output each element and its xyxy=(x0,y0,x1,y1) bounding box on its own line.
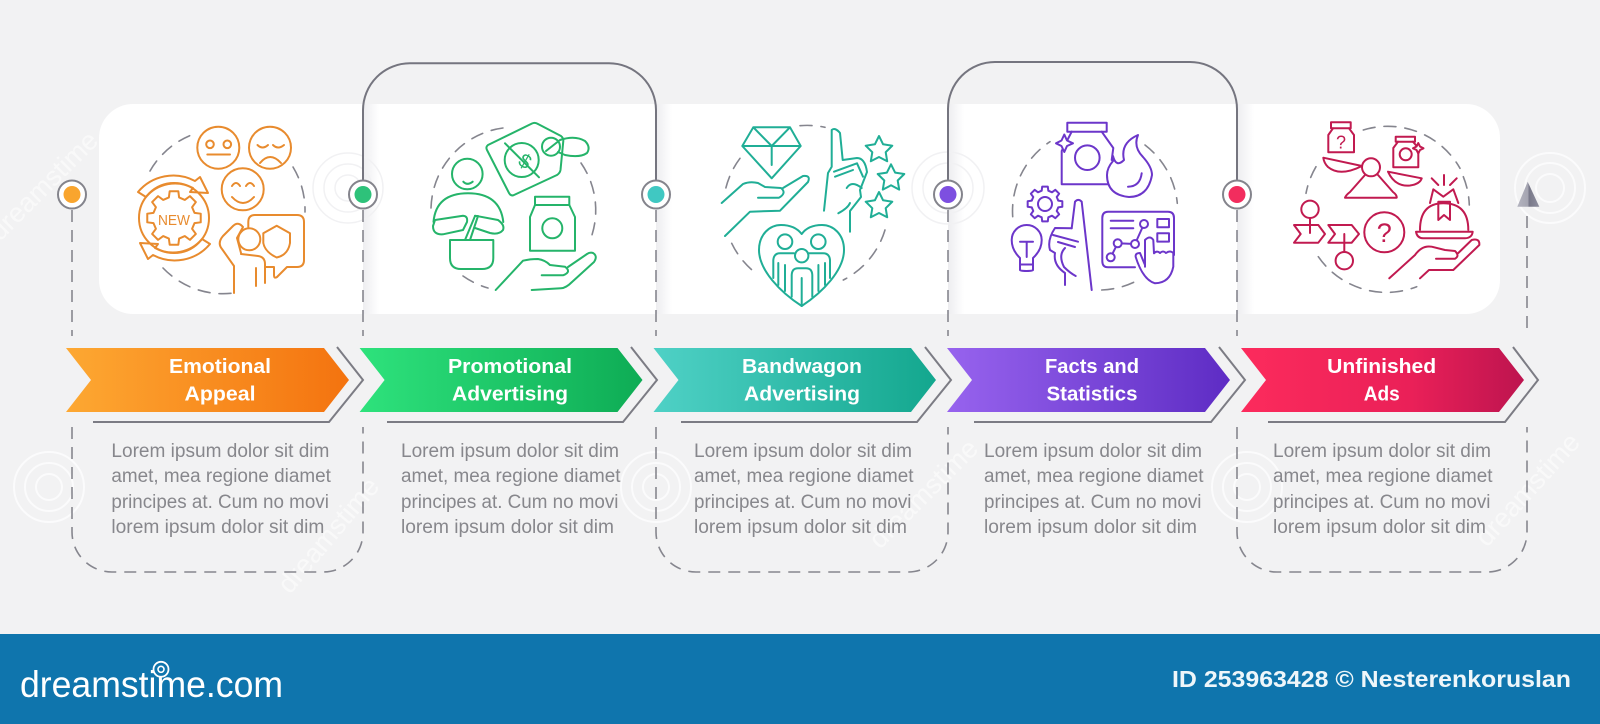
node: purple xyxy=(934,180,962,208)
text: unfinished ads: principes at. Cum no movi xyxy=(1273,492,1490,513)
text: unfinished ads xyxy=(1273,441,1493,538)
text: facts and statistics: lorem ipsum dolor sit dim xyxy=(984,517,1197,538)
text: dreamstime xyxy=(272,472,385,599)
heading: bandwagon advertising: Bandwagon xyxy=(742,355,862,378)
text: unfinished ads: lorem ipsum dolor sit dim xyxy=(1273,517,1486,538)
step 3: bandwagon advertising xyxy=(654,347,951,538)
icon: promotional advertising xyxy=(431,123,596,290)
arrowhead: timeline end xyxy=(1517,182,1539,207)
footer band xyxy=(0,634,1600,724)
text: facts and statistics: amet, mea regione diamet xyxy=(984,466,1204,487)
heading: emotional appeal: Emotional xyxy=(169,355,271,378)
step 4: facts and statistics xyxy=(947,347,1245,538)
heading: promotional advertising: Advertising xyxy=(452,382,568,406)
text: promotional advertising: Lorem ipsum dolor sit dim xyxy=(401,441,619,462)
panel: white icon card xyxy=(99,104,1500,314)
heading: bandwagon advertising xyxy=(742,355,862,406)
step 2: promotional advertising xyxy=(360,347,657,538)
timeline connector lines xyxy=(72,62,1527,572)
heading: unfinished ads: Unfinished xyxy=(1327,355,1436,378)
heading: facts and statistics xyxy=(1045,355,1139,406)
text: unfinished ads: Lorem ipsum dolor sit dim xyxy=(1273,441,1491,462)
text: promotional advertising: lorem ipsum dolor sit dim xyxy=(401,517,614,538)
icon: promotional advertising: $ xyxy=(514,149,535,174)
icon: bandwagon advertising xyxy=(722,125,904,306)
text: emotional appeal: lorem ipsum dolor sit dim xyxy=(111,517,324,538)
heading: promotional advertising: Promotional xyxy=(448,355,572,378)
banner: bandwagon advertising xyxy=(654,348,936,412)
text: bandwagon advertising: principes at. Cum no movi xyxy=(694,492,912,513)
icon: unfinished ads: ? xyxy=(1336,132,1346,152)
node: teal xyxy=(642,180,670,208)
heading: unfinished ads: Ads xyxy=(1364,382,1400,406)
text: emotional appeal: amet, mea regione diamet xyxy=(111,466,332,487)
logo: dreamstime: dreamstime.com xyxy=(20,664,283,705)
banner: promotional advertising xyxy=(360,348,642,412)
image id and credit: ID 253963428 © Nesterenkoruslan xyxy=(1172,666,1571,692)
node: orange xyxy=(58,180,86,208)
heading: bandwagon advertising: Advertising xyxy=(744,382,860,406)
banner: unfinished ads xyxy=(1241,348,1524,412)
text: bandwagon advertising: amet, mea regione diamet xyxy=(694,466,914,487)
text: promotional advertising xyxy=(401,441,621,538)
text: emotional appeal xyxy=(111,441,332,538)
icon: unfinished ads xyxy=(1294,122,1479,292)
banner: emotional appeal xyxy=(66,348,349,412)
text: facts and statistics: principes at. Cum no movi xyxy=(984,492,1202,513)
text: bandwagon advertising: lorem ipsum dolor sit dim xyxy=(694,517,907,538)
icon: unfinished ads: ? xyxy=(1377,218,1392,248)
text: unfinished ads: amet, mea regione diamet xyxy=(1273,466,1493,487)
heading: promotional advertising xyxy=(448,355,572,406)
node: green xyxy=(349,180,377,208)
step 1: emotional appeal xyxy=(66,347,363,538)
text: bandwagon advertising: Lorem ipsum dolor sit dim xyxy=(694,441,912,462)
node: red xyxy=(1223,180,1251,208)
banner: facts and statistics xyxy=(947,348,1230,412)
text: emotional appeal: principes at. Cum no movi xyxy=(111,492,329,513)
text: facts and statistics: Lorem ipsum dolor sit dim xyxy=(984,441,1202,462)
heading: facts and statistics: Facts and xyxy=(1045,355,1139,378)
step 5: unfinished ads xyxy=(1241,347,1538,538)
text: promotional advertising: principes at. Cum no movi xyxy=(401,492,618,513)
text: dreamstime xyxy=(863,433,984,554)
text: bandwagon advertising xyxy=(694,441,914,538)
heading: unfinished ads xyxy=(1327,355,1436,406)
text: dreamstime xyxy=(1469,427,1586,552)
text: promotional advertising: amet, mea regione diamet xyxy=(401,466,621,487)
icon: emotional appeal: NEW xyxy=(158,212,191,229)
text: facts and statistics xyxy=(984,441,1204,538)
heading: emotional appeal xyxy=(169,355,271,406)
heading: facts and statistics: Statistics xyxy=(1046,382,1138,406)
icon: emotional appeal xyxy=(138,127,305,294)
heading: emotional appeal: Appeal xyxy=(184,382,256,406)
icon: facts and statistics xyxy=(1012,123,1177,290)
text: emotional appeal: Lorem ipsum dolor sit dim xyxy=(111,441,329,462)
